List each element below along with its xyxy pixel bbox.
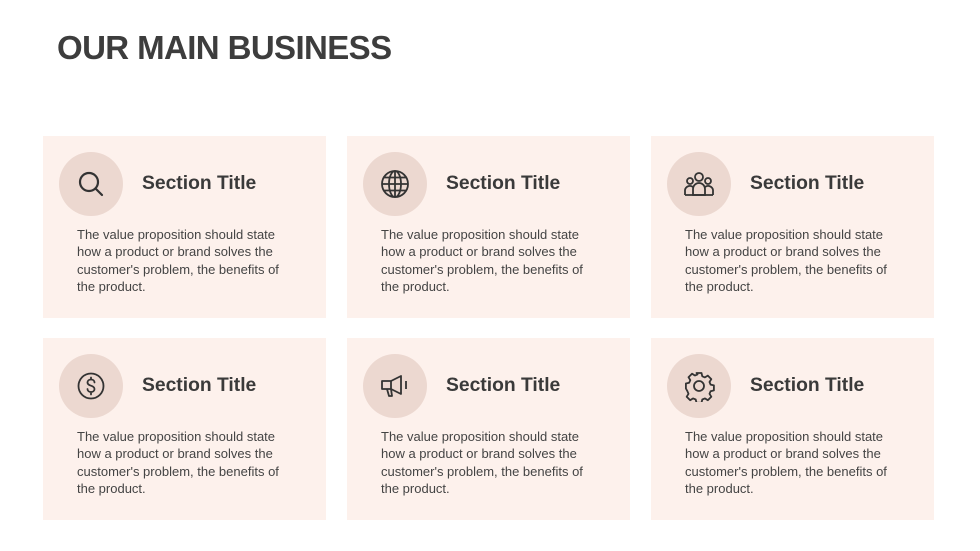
card: megaphone (347, 338, 630, 520)
icon: megaphone (363, 354, 427, 418)
text: The value proposition should state how a product or brand solves the customer's problem, the benefits of the product. (685, 429, 887, 496)
card: people (651, 136, 934, 318)
section title: Section Title (446, 173, 560, 194)
text: The value proposition should state how a product or brand solves the customer's problem, the benefits of the product. (77, 429, 279, 496)
section title: Section Title (750, 173, 864, 194)
section title: Section Title (142, 173, 256, 194)
title: OUR MAIN BUSINESS (57, 29, 392, 66)
text: The value proposition should state how a product or brand solves the customer's problem, the benefits of the product. (685, 227, 887, 294)
card: globe (347, 136, 630, 318)
icon: search (59, 152, 123, 216)
text: The value proposition should state how a product or brand solves the customer's problem, the benefits of the product. (77, 227, 279, 294)
text: The value proposition should state how a product or brand solves the customer's problem, the benefits of the product. (381, 429, 583, 496)
section title: Section Title (750, 375, 864, 396)
icon: globe (363, 152, 427, 216)
text: The value proposition should state how a product or brand solves the customer's problem, the benefits of the product. (381, 227, 583, 294)
card: gear (651, 338, 934, 520)
card: search (43, 136, 326, 318)
section title: Section Title (142, 375, 256, 396)
icon: dollar (59, 354, 123, 418)
icon: gear (667, 354, 731, 418)
card: dollar (43, 338, 326, 520)
section title: Section Title (446, 375, 560, 396)
icon: people (667, 152, 731, 216)
